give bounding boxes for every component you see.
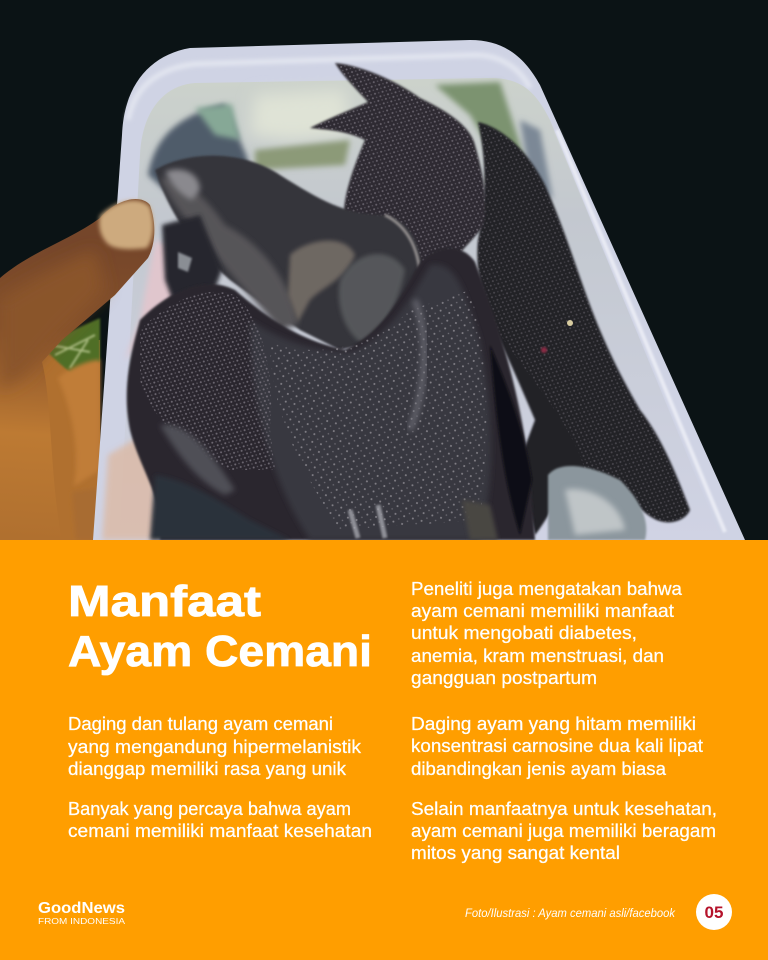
title: Ayam Cemani (68, 627, 372, 676)
text block: right paragraph 1: untuk mengobati diabetes, (411, 622, 637, 643)
chicken neck and head (155, 156, 421, 350)
logo: GoodNews from Indonesia: GoodNews (38, 900, 125, 917)
text block: right paragraph 3 (411, 798, 717, 863)
black chicken foot (310, 63, 485, 293)
text block: right paragraph 2 (411, 713, 703, 779)
text block: right paragraph 3: Selain manfaatnya untuk kesehatan, (411, 798, 717, 819)
text block: right paragraph 3: ayam cemani juga memiliki beragam (411, 820, 716, 841)
photo: hand holding box of black chicken meat (0, 0, 768, 540)
text block: left paragraph 1: Daging dan tulang ayam cemani (68, 713, 333, 734)
text block: right paragraph 2: Daging ayam yang hitam memiliki (411, 713, 696, 734)
page number badge (696, 894, 732, 930)
logo: GoodNews from Indonesia (38, 900, 126, 926)
container right wall highlight (557, 130, 725, 532)
text block: left paragraph 2 (68, 798, 372, 841)
text block: left paragraph 2: Banyak yang percaya bahwa ayam (68, 798, 351, 819)
text block: left paragraph 1 (68, 713, 362, 779)
title (68, 577, 372, 676)
text block: right paragraph 3: mitos yang sangat kental (411, 842, 620, 863)
text block: left paragraph 1: yang mengandung hipermelanistik (68, 736, 362, 757)
photo credit: Foto/Ilustrasi : Ayam cemani asli/facebook (465, 908, 676, 920)
text block: left paragraph 2: cemani memiliki manfaat kesehatan (68, 820, 372, 841)
container outer rim (93, 40, 745, 540)
food container (93, 40, 745, 540)
text block: right paragraph 1: ayam cemani memiliki manfaat (411, 600, 674, 621)
logo: GoodNews from Indonesia: FROM INDONESIA (38, 917, 126, 926)
text block: right paragraph 1: anemia, kram menstruasi, dan (411, 645, 664, 666)
black chicken leg (477, 122, 690, 535)
text block: right paragraph 2: dibandingkan jenis ayam biasa (411, 758, 667, 779)
reflection through container (148, 104, 248, 190)
text block: right paragraph 1: Peneliti juga mengatakan bahwa (411, 578, 683, 599)
text block: right paragraph 1 (411, 578, 683, 688)
chicken body (127, 248, 646, 540)
text block: right paragraph 1: gangguan postpartum (411, 667, 597, 688)
title: Manfaat (68, 577, 261, 626)
palm and thumb in front of the box (0, 199, 154, 540)
text block: left paragraph 1: dianggap memiliki rasa yang unik (68, 758, 347, 779)
icon: fingers behind the box (0, 318, 100, 540)
page number badge: 05 (705, 903, 723, 922)
orange panel (0, 540, 768, 960)
text block: right paragraph 2: konsentrasi carnosine dua kali lipat (411, 735, 703, 756)
photo background (0, 0, 768, 540)
container interior (119, 78, 722, 540)
